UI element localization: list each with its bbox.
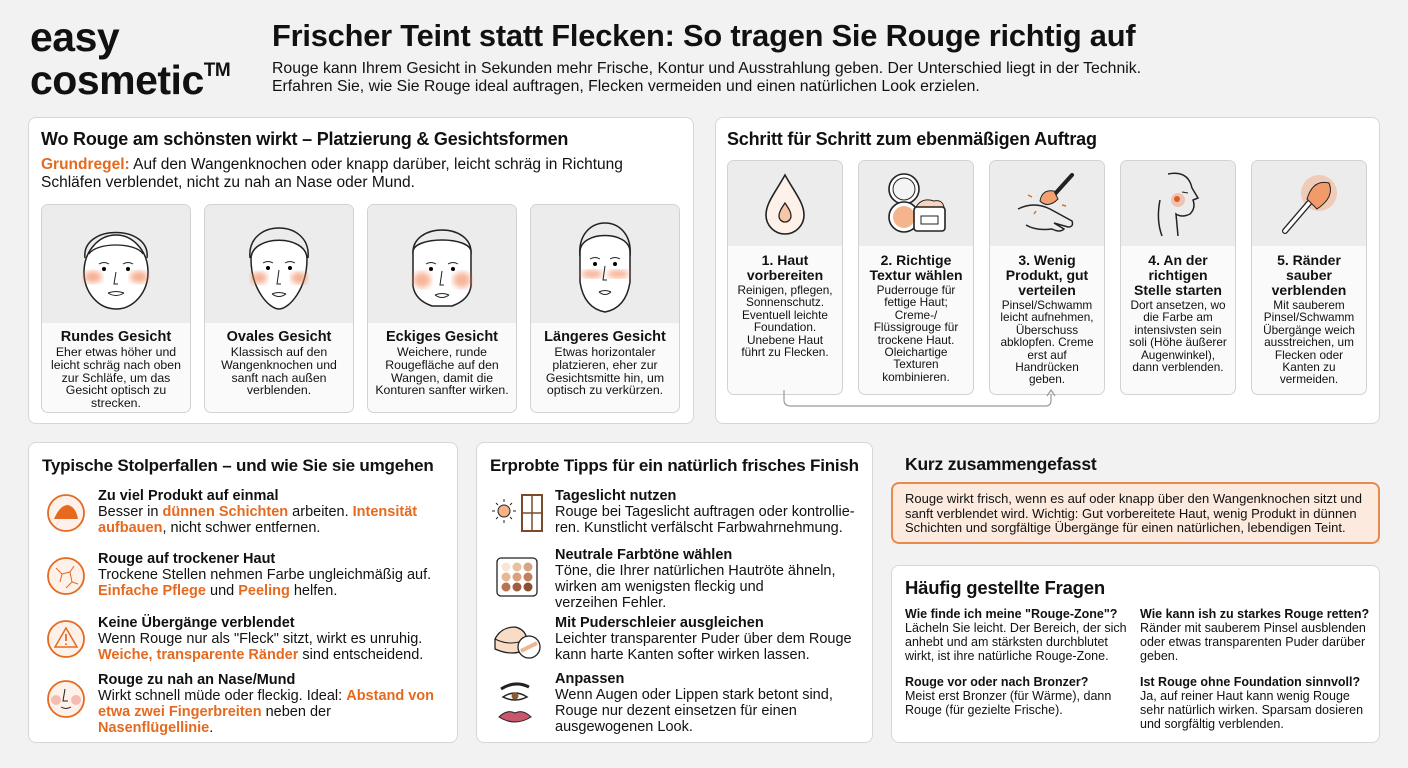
card: round face bbox=[41, 204, 191, 413]
step 3: Pinsel/Schwamm leicht aufnehmen, Überschuss abklopfen. Creme erst auf Handrücken geben. bbox=[1000, 298, 1094, 386]
step 4: 4. An der richtigen Stelle starten bbox=[1134, 252, 1222, 298]
callout: summary bbox=[891, 482, 1380, 544]
icon: brush & hand bbox=[990, 161, 1104, 246]
step 3: 3. Wenig Produkt, gut verteilen bbox=[1006, 252, 1088, 298]
faq 4: Ja, auf reiner Haut kann wenig Rouge sehr natürlich wirken. Sparsam dosieren und sorgfältig verblenden. bbox=[1140, 689, 1363, 731]
heading: pitfalls: Typische Stolperfallen – und wie Sie sie umgehen bbox=[42, 456, 434, 475]
item: daylight: Rouge bei Tageslicht auftragen oder kontrollie- bbox=[555, 504, 855, 520]
faq 1: Wie finde ich meine "Rouge-Zone"? bbox=[905, 607, 1117, 621]
item: powder veil: Leichter transparenter Puder über dem Rouge kann harte Kanten softer wirken lassen. bbox=[555, 631, 852, 663]
faq 1: Lächeln Sie leicht. Der Bereich, der sich anhebt und am stärksten durchblutet wirkt, ist ihre natürliche Rouge-Zone. bbox=[905, 621, 1127, 663]
item: no blending bbox=[98, 614, 423, 663]
step 2: 2. Richtige Textur wählen bbox=[869, 252, 963, 283]
faq 3: Rouge vor oder nach Bronzer? bbox=[905, 675, 1088, 689]
card: oval face: Klassisch auf den Wangenknochen und sanft nach außen verblenden. bbox=[221, 345, 337, 397]
icon: palette bbox=[496, 557, 538, 597]
item: too much product bbox=[98, 488, 417, 536]
item: powder veil bbox=[555, 615, 852, 663]
item: neutral tones: Neutrale Farbtöne wählen bbox=[555, 547, 732, 563]
heading: steps: Schritt für Schritt zum ebenmäßigen Auftrag bbox=[727, 129, 1097, 149]
item: adapt: Anpassen bbox=[555, 671, 624, 687]
icon: sun & window bbox=[492, 494, 543, 532]
logo: easy bbox=[30, 14, 119, 60]
step 2 bbox=[858, 160, 974, 395]
subtitle: Erfahren Sie, wie Sie Rouge ideal auftragen, Flecken vermeiden und einen natürlichen Look erzielen. bbox=[272, 78, 980, 95]
step 3 bbox=[989, 160, 1105, 395]
panel: tips bbox=[476, 442, 873, 743]
item: neutral tones: verzeihen Fehler. bbox=[555, 595, 666, 611]
step 5 bbox=[1251, 160, 1367, 395]
item: dry skin bbox=[98, 551, 431, 599]
icon: blending brush bbox=[1252, 161, 1366, 246]
logo bbox=[30, 14, 230, 103]
icon: nose bbox=[47, 680, 85, 718]
step 1 bbox=[727, 160, 843, 395]
item: neutral tones: wirken am wenigsten fleckig und bbox=[555, 579, 764, 595]
item: daylight bbox=[555, 488, 855, 536]
icon: dry skin bbox=[47, 557, 85, 595]
logo: cosmeticTM bbox=[30, 57, 230, 103]
faq 4: Ist Rouge ohne Foundation sinnvoll? bbox=[1140, 675, 1360, 689]
title: Frischer Teint statt Flecken: So tragen Sie Rouge richtig auf bbox=[272, 18, 1135, 53]
heading: summary: Kurz zusammengefasst bbox=[905, 454, 1096, 474]
subtitle: Rouge kann Ihrem Gesicht in Sekunden mehr Frische, Kontur und Ausstrahlung geben. Der Unterschied liegt in der Technik. bbox=[272, 60, 1141, 77]
panel: FAQ bbox=[891, 565, 1380, 743]
item: neutral tones bbox=[555, 547, 836, 611]
heading: placement: Wo Rouge am schönsten wirkt – Platzierung & Gesichtsformen bbox=[41, 129, 568, 149]
item: no blending: Keine Übergänge verblendet bbox=[98, 615, 295, 631]
card: square face: Weichere, runde Rougefläche auf den Wangen, damit die Konturen sanfter wirken. bbox=[375, 345, 509, 397]
heading: FAQ: Häufig gestellte Fragen bbox=[905, 577, 1105, 598]
item: too much product: Zu viel Produkt auf einmal bbox=[98, 488, 278, 504]
card: long face: Längeres Gesicht bbox=[544, 329, 666, 345]
card: round face: Rundes Gesicht bbox=[61, 329, 171, 345]
icon: powder puff bbox=[494, 626, 541, 659]
step 5: 5. Ränder sauber verblenden bbox=[1272, 252, 1346, 298]
card: round face: Eher etwas höher und leicht schräg nach oben zur Schläfe, um das Gesicht optisch zu strecken. bbox=[51, 345, 181, 410]
item: adapt: Wenn Augen oder Lippen stark betont sind, Rouge nur dezent einsetzen für einen ausgewogenen Look. bbox=[555, 687, 833, 735]
heading: tips: Erprobte Tipps für ein natürlich frisches Finish bbox=[490, 456, 859, 475]
icon: warning bbox=[47, 620, 85, 658]
icon: powder bbox=[47, 494, 85, 532]
panel: pitfalls bbox=[28, 442, 458, 743]
item: dry skin: Rouge auf trockener Haut bbox=[98, 551, 275, 567]
step 4: Dort ansetzen, wo die Farbe am intensivsten sein soli (Höhe äußerer Augenwinkel), dann verblenden. bbox=[1129, 298, 1227, 374]
card: oval face bbox=[204, 204, 354, 413]
item: daylight: Tageslicht nutzen bbox=[555, 488, 676, 504]
icon: drop bbox=[728, 161, 842, 246]
arrow: connector bbox=[783, 389, 1056, 407]
card: oval face: Ovales Gesicht bbox=[227, 329, 331, 345]
subtitle bbox=[272, 60, 1141, 95]
step 1: 1. Haut vorbereiten bbox=[747, 252, 823, 283]
panel: step by step bbox=[715, 117, 1380, 424]
faq 3 bbox=[905, 675, 1111, 717]
step 1: Reinigen, pflegen, Sonnenschutz. Eventuell leichte Foundation. Unebene Haut führt zu Flecken. bbox=[737, 283, 833, 359]
item: too close to nose: Rouge zu nah an Nase/Mund bbox=[98, 672, 295, 688]
item: no blending: Wenn Rouge nur als "Fleck" sitzt, wirkt es unruhig. Weiche, transparente Ränder sind entscheidend. bbox=[98, 631, 423, 663]
item: daylight: ren. Kunstlicht verfälscht Farbwahrnehmung. bbox=[555, 520, 843, 536]
item: too much product: Besser in dünnen Schichten arbeiten. Intensität aufbauen, nicht schwer entfernen. bbox=[98, 504, 417, 536]
callout: summary: Rouge wirkt frisch, wenn es auf oder knapp über den Wangenknochen sitzt und sanft verblendet wird. Wichtig: Gut vorbereitete Haut, wenig Produkt in dünnen Schichten und sorgfältige Übergänge für einen natürlichen, lebendigen Teint. bbox=[905, 491, 1362, 535]
icon: eye & lips bbox=[498, 682, 532, 722]
icon: compact & jar bbox=[859, 161, 973, 246]
panel: placement & face shapes bbox=[28, 117, 694, 424]
faq 2: Ränder mit sauberem Pinsel ausblenden oder etwas transparenten Puder darüber geben. bbox=[1140, 621, 1366, 663]
step 2: Puderrouge für fettige Haut; Creme-/ Flüssigrouge für trockene Haut. Oleichartige Texturen kombinieren. bbox=[874, 283, 958, 384]
card: long face: Etwas horizontaler platzieren, eher zur Gesichtsmitte hin, um optisch zu verkürzen. bbox=[546, 345, 664, 397]
card: square face bbox=[367, 204, 517, 413]
faq 3: Meist erst Bronzer (für Wärme), dann Rouge (für gezielte Frische). bbox=[905, 689, 1111, 717]
item: too close to nose: Wirkt schnell müde oder fleckig. Ideal: Abstand von etwa zwei Fingerbreiten neben der Nasenflügellinie. bbox=[98, 688, 434, 736]
step 4 bbox=[1120, 160, 1236, 395]
item: neutral tones: Töne, die Ihrer natürlichen Hautröte ähneln, bbox=[555, 563, 836, 579]
card: long face bbox=[530, 204, 680, 413]
item: dry skin: Trockene Stellen nehmen Farbe ungleichmäßig auf. Einfache Pflege und Peeling helfen. bbox=[98, 567, 431, 599]
step 5: Mit sauberem Pinsel/Schwamm Übergänge weich ausstreichen, um Flecken oder Kanten zu vermeiden. bbox=[1263, 298, 1355, 386]
icon: face profile bbox=[1121, 161, 1235, 246]
card: square face: Eckiges Gesicht bbox=[386, 329, 498, 345]
faq 2: Wie kann ish zu starkes Rouge retten? bbox=[1140, 607, 1369, 621]
text: Grundregel: Grundregel: Auf den Wangenknochen oder knapp darüber, leicht schräg in Richtung Schläfen verblendet, nicht zu nah an Nase oder Mund. bbox=[41, 156, 623, 191]
item: powder veil: Mit Puderschleier ausgleichen bbox=[555, 615, 764, 631]
